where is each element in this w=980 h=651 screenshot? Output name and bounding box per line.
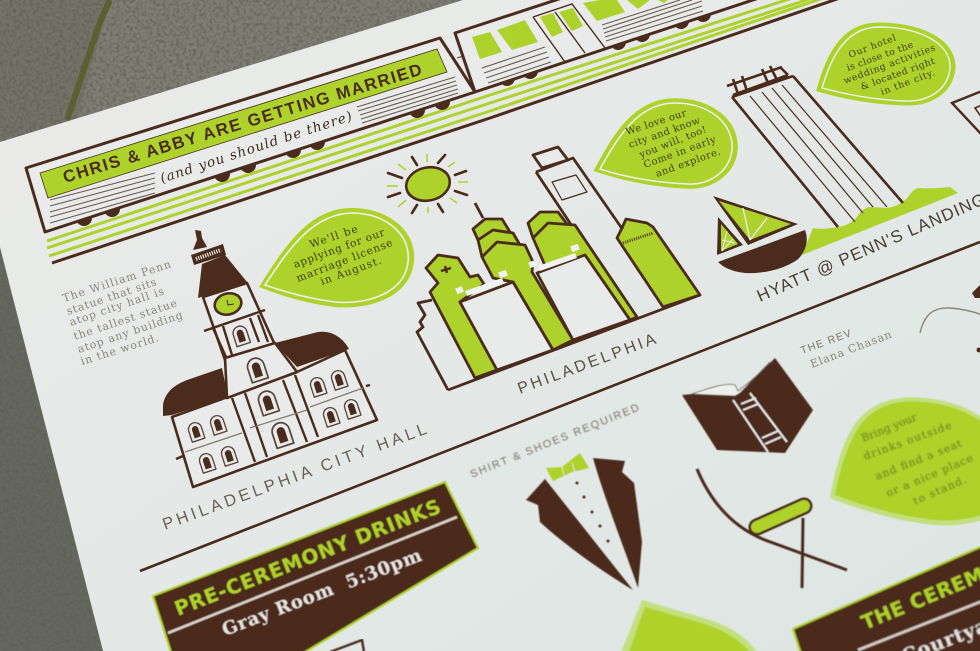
water [802, 187, 958, 255]
car two windows [472, 0, 668, 59]
white panel buildings [460, 282, 553, 370]
callout: marriage license: marriage license [295, 237, 394, 285]
label: Philadelphia: PHILADELPHIA [515, 331, 659, 398]
callout: bring your drinks: or a nice place [884, 451, 975, 500]
label: Philadelphia City Hall: PHILADELPHIA CITY HALL [160, 420, 429, 534]
partial building at bottom [330, 640, 364, 651]
train wheels [76, 6, 711, 226]
fact text: William Penn statue: the tallest statue [72, 297, 178, 343]
callout: bring your drinks: and find a seat [873, 437, 964, 483]
green tower A [426, 255, 497, 378]
label: The Rev: THE REV [799, 327, 853, 357]
track rails [47, 0, 840, 263]
liberty tower [533, 147, 568, 168]
callout: hotel: & located right [859, 56, 937, 93]
banner: the ceremony [793, 543, 980, 651]
clock [212, 290, 244, 318]
callout: love our city: you will, too! [637, 125, 708, 161]
callout: bring your drinks: to stand. [911, 473, 968, 508]
tower [727, 66, 903, 227]
callout: hotel [818, 24, 954, 104]
fact text: William Penn statue: The William Penn [61, 258, 172, 305]
arched windows [187, 324, 361, 473]
car one hatching [50, 77, 458, 223]
base line [448, 295, 700, 390]
building outlines [172, 350, 377, 487]
fact text: William Penn statue: in the world. [79, 331, 160, 368]
label: The Rev: Elana Chasan [808, 328, 893, 371]
callout: marriage license: in August. [319, 255, 383, 288]
cross mark [441, 266, 451, 273]
fact text: William Penn statue: statue that sits [65, 276, 158, 318]
mid pavilion [225, 343, 297, 398]
icon: tuxedo [526, 453, 642, 590]
partial icon at right edge [920, 91, 980, 352]
title band [40, 49, 447, 198]
banner: pre-ceremony drinks [153, 482, 478, 651]
callout: marriage license: We'll be [308, 223, 359, 251]
callout: hotel: Our hotel [847, 33, 898, 61]
left stepped block [417, 300, 448, 390]
fact text: William Penn statue [61, 258, 184, 368]
bow tie [546, 453, 589, 481]
fact text: William Penn statue: atop any building [76, 308, 184, 356]
subtitle: (and you should be there) [158, 108, 354, 187]
train car one [26, 38, 475, 232]
callout: hotel: is close to the [845, 40, 915, 74]
floor lines [185, 388, 363, 452]
label: shirt and shoes required: SHIRT & SHOES REQUIRED [469, 402, 641, 481]
divider line [140, 242, 980, 571]
banner heading: PRE-CEREMONY DRINKS [171, 494, 444, 621]
green tower C [528, 212, 567, 238]
callout: bring your drinks: Bring your [859, 410, 920, 445]
main title: CHRIS & ABBY ARE GETTING MARRIED [61, 60, 424, 187]
spire and platform [193, 230, 207, 250]
callout: love our city: and explore. [654, 147, 722, 180]
green tower B [475, 203, 483, 218]
illustration: Hyatt tower and sailboat [713, 66, 958, 273]
tower shaft [203, 283, 275, 360]
callout: love our city: We love our [625, 108, 688, 138]
banner details: Gray Room 5:30pm [219, 545, 425, 641]
fact text: William Penn statue: atop city hall is [68, 285, 166, 329]
callout: hotel: wedding activities [842, 42, 937, 87]
ledges and columns [176, 310, 370, 462]
callout: love our city: Come in early [642, 134, 718, 171]
icon: chair [697, 469, 847, 588]
callout: bring your drinks: drinks outside [862, 419, 953, 463]
right green tower [617, 219, 700, 307]
car two door [533, 4, 605, 62]
sailboat [713, 196, 807, 273]
callout: bring your drinks [830, 397, 980, 525]
illustration: Philadelphia skyline [417, 147, 700, 390]
illustration: Philadelphia City Hall [163, 230, 377, 487]
callout: hotel: in the city. [879, 67, 936, 98]
car two hatching [482, 0, 703, 83]
callout: love our city [596, 100, 736, 187]
shirt studs [576, 482, 610, 542]
roofs [163, 368, 228, 416]
callout: marriage license [262, 210, 412, 305]
icon: sun [387, 154, 468, 213]
train illustration [26, 0, 840, 263]
awning strips [455, 244, 580, 296]
callout: bottom partial [618, 600, 762, 651]
train car two [455, 0, 762, 92]
icon: book [682, 358, 813, 453]
callout: love our city: city and know [627, 115, 702, 151]
callout: marriage license: applying for our [292, 226, 387, 271]
coupler [457, 54, 470, 58]
